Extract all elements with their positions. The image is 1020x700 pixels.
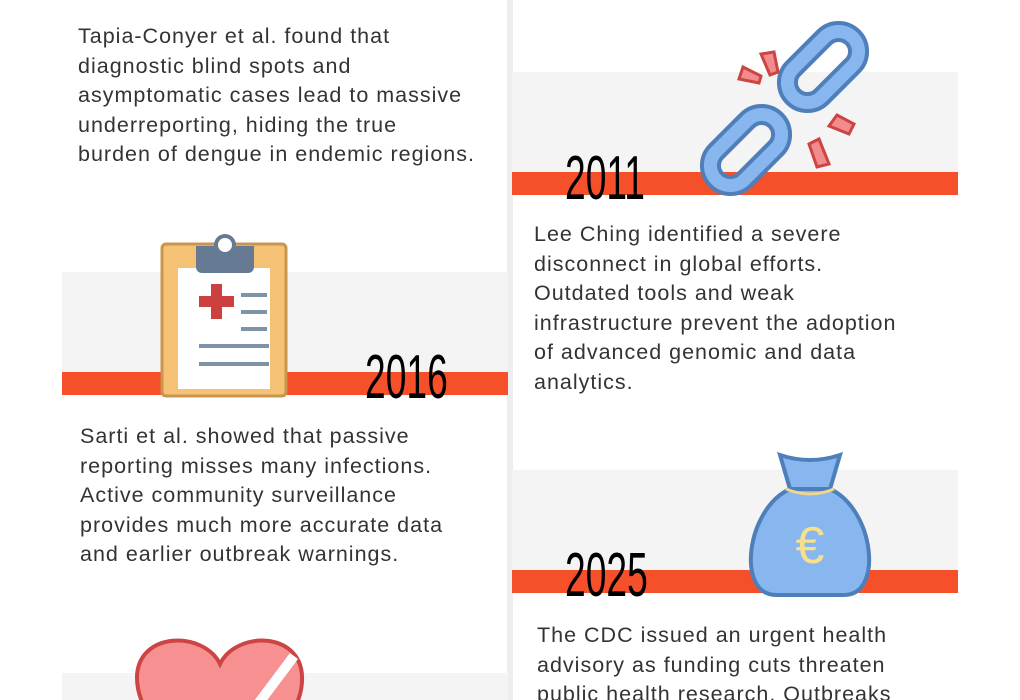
- timeline bar: [512, 172, 958, 195]
- panel: Lee Ching text: analytics.: [534, 370, 634, 394]
- panel: Lee Ching text: Outdated tools and weak: [534, 281, 795, 305]
- panel: CDC text: [537, 623, 891, 700]
- band: [512, 470, 958, 570]
- icon: clipboard: [160, 234, 288, 398]
- panel: 2025: [512, 452, 958, 610]
- panel: Lee Ching text: Lee Ching identified a severe: [534, 222, 842, 246]
- panel: Sarti text: [80, 424, 443, 566]
- panel: 2016: [62, 234, 508, 412]
- panel: Tapia-Conyer text: burden of dengue in endemic regions.: [78, 142, 475, 166]
- panel: Tapia-Conyer text: underreporting, hiding the true: [78, 112, 397, 136]
- panel: Sarti text: provides much more accurate data: [80, 512, 443, 536]
- panel: Tapia-Conyer text: asymptomatic cases lead to massive: [78, 83, 462, 107]
- year 2016: 2016: [365, 343, 448, 412]
- panel: Sarti text: reporting misses many infections.: [80, 454, 432, 478]
- year 2011: 2011: [565, 144, 645, 213]
- band: [62, 673, 508, 700]
- panel: Sarti text: Active community surveillance: [80, 483, 397, 507]
- panel: Tapia-Conyer text: diagnostic blind spots and: [78, 54, 351, 78]
- band: [62, 272, 508, 372]
- panel: 2011: [512, 21, 958, 213]
- panel: CDC text: The CDC issued an urgent health: [537, 623, 887, 647]
- panel: Lee Ching text: infrastructure prevent the adoption: [534, 310, 896, 334]
- panel: Lee Ching text: disconnect in global efforts.: [534, 252, 823, 276]
- panel: Tapia-Conyer text: [78, 24, 475, 166]
- timeline bar: [512, 570, 958, 593]
- divider line: [507, 0, 513, 700]
- icon: money bag: €: [796, 517, 825, 575]
- year 2025: 2025: [565, 541, 648, 610]
- panel: bottom left: [62, 638, 507, 700]
- panel: Sarti text: Sarti et al. showed that passive: [80, 424, 410, 448]
- band: [512, 72, 958, 172]
- icon: heart: [135, 638, 304, 700]
- timeline bar: [62, 372, 508, 395]
- panel: Tapia-Conyer text: Tapia-Conyer et al. found that: [78, 24, 390, 48]
- panel: Lee Ching text: [534, 222, 896, 394]
- icon: broken chain: [700, 21, 870, 196]
- icon: money bag: [748, 452, 872, 597]
- panel: Sarti text: and earlier outbreak warnings.: [80, 542, 399, 566]
- panel: CDC text: advisory as funding cuts threaten: [537, 652, 886, 676]
- panel: Lee Ching text: of advanced genomic and data: [534, 340, 856, 364]
